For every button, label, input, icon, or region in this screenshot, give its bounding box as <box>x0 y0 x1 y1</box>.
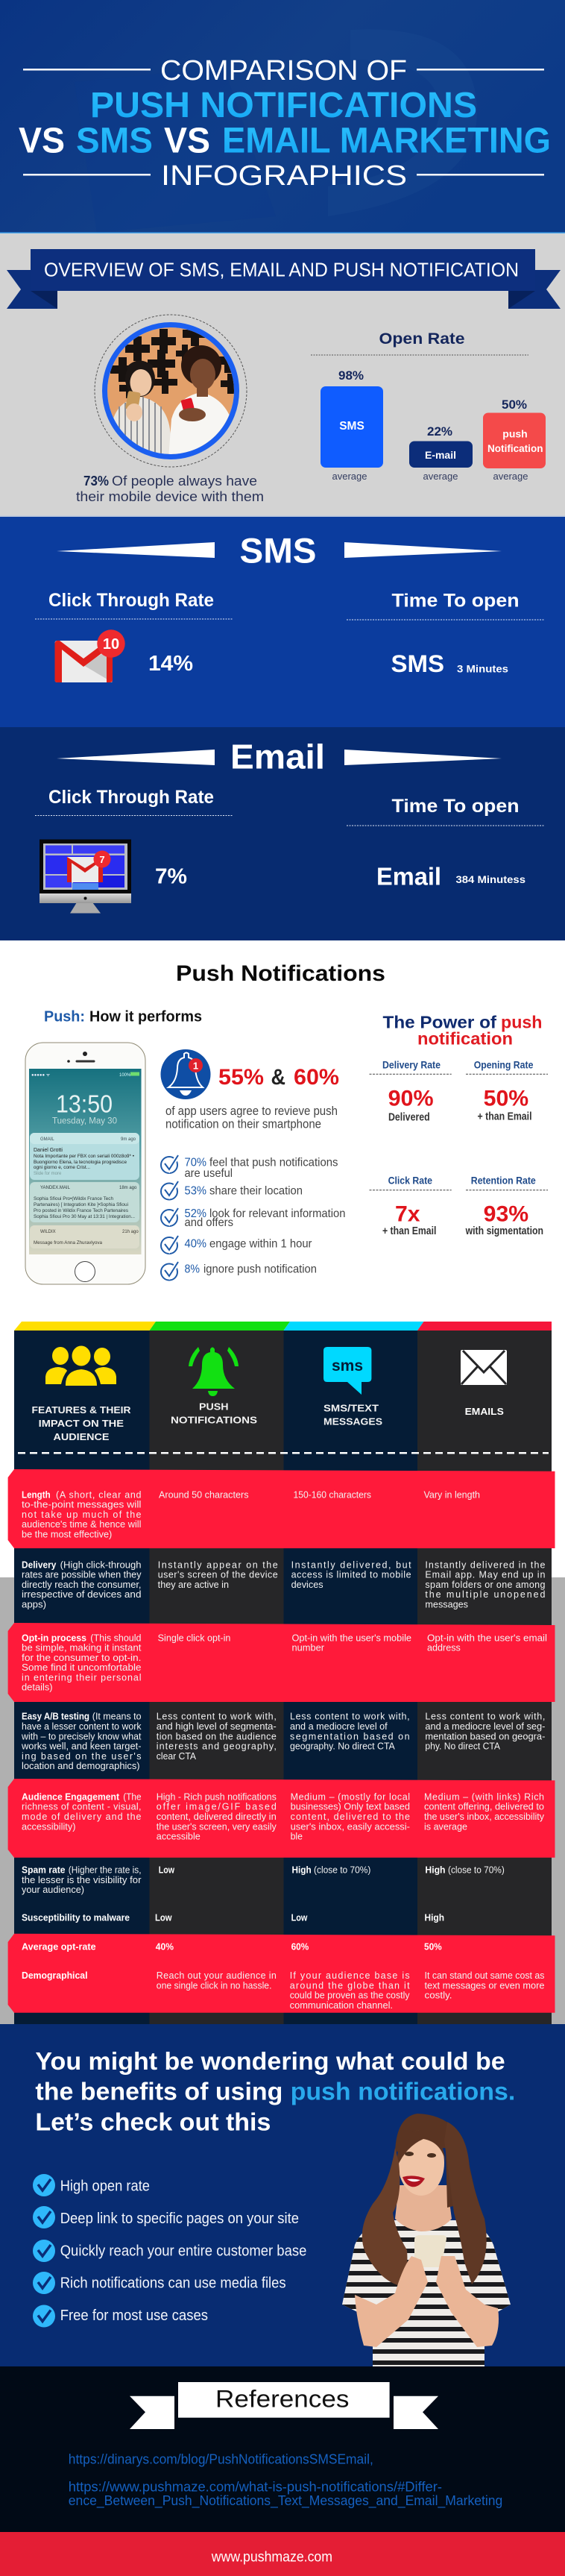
table header: sms: SMS/TEXT <box>323 1404 379 1414</box>
icon: envelope <box>461 1350 507 1385</box>
row: easy A/B testing: tion based on the audience <box>157 1731 277 1741</box>
row: audience engagement: is average <box>424 1821 467 1832</box>
title: INFOGRAPHICS <box>161 160 407 192</box>
benefit: rich notifications: Rich notifications can use media files <box>60 2275 286 2292</box>
row: easy A/B testing: geography. No direct CTA <box>290 1741 395 1752</box>
icon: people <box>45 1345 116 1386</box>
checklist <box>161 1155 346 1280</box>
row: easy A/B testing: location and demographics) <box>22 1761 140 1771</box>
row: average opt-rate and demographical: 60% <box>291 1941 309 1952</box>
row: delivery: messages <box>425 1599 468 1609</box>
Email heading: Email <box>230 737 325 776</box>
subheading: how it performs: Push: <box>44 1008 85 1025</box>
item: 52 percent: look for relevant information <box>209 1207 346 1220</box>
item: 53 percent: share their location <box>209 1185 303 1198</box>
click through rate: Click Through Rate <box>48 787 214 808</box>
bar: push notification 50% <box>483 398 546 482</box>
row: spam rate: High <box>292 1865 312 1876</box>
item: 70 percent: are useful <box>185 1167 233 1180</box>
notification card: yandex <box>30 1182 139 1222</box>
row: delivery: apps) <box>22 1599 46 1609</box>
row: delivery: access is limited to mobile <box>291 1570 411 1580</box>
stat: 55 and 60 percent: 60% <box>294 1065 339 1090</box>
Email heading <box>57 737 502 776</box>
row: easy A/B testing: Less content to work with, <box>425 1712 545 1722</box>
row: easy A/B testing: Less content to work with, <box>290 1712 410 1722</box>
table header: features: FEATURES & THEIR <box>31 1405 131 1416</box>
benefit: free: Free for most use cases <box>60 2308 208 2324</box>
row: average opt-rate and demographical: It can stand out same cost as <box>425 1970 544 1981</box>
stat: click rate: + than Email <box>382 1225 436 1237</box>
row: audience engagement: offer image/GIF based <box>157 1802 277 1812</box>
click through rate: Click Through Rate <box>48 590 214 611</box>
row: easy A/B testing: Less content to work with, <box>157 1712 277 1722</box>
row: audience engagement: the user's inbox, accessibility <box>424 1812 545 1822</box>
row: audience engagement: mode of delivery and the <box>22 1812 142 1822</box>
row: audience engagement: user's inbox, easily accessi- <box>291 1821 410 1832</box>
item: 70 percent: feel that push notifications <box>209 1156 338 1169</box>
references banner <box>130 2382 438 2429</box>
row: average opt-rate and demographical: text messages or even more <box>425 1980 545 1991</box>
stat: 55 and 60 percent: 55% <box>218 1065 264 1090</box>
stat: retention rate <box>465 1175 548 1237</box>
row: delivery: Instantly delivered in the <box>425 1559 545 1570</box>
row: spam rate: High <box>425 1865 446 1876</box>
row: average opt-rate and demographical: around the globe than it <box>290 1980 410 1991</box>
benefits headline: Let’s check out this <box>35 2108 271 2136</box>
row: opt-in process: in entering their personal <box>22 1672 142 1683</box>
row: length: not take up much of the <box>22 1510 142 1520</box>
stat: click rate: Click Rate <box>388 1175 432 1187</box>
overview ribbon banner <box>7 249 561 309</box>
row: easy A/B testing: with – to precisely know what <box>21 1731 142 1741</box>
stat: delivery rate <box>370 1059 452 1123</box>
notification card: yandex: YANDEX.MAIL <box>40 1186 71 1190</box>
row: length <box>8 1469 555 1548</box>
item: 40 percent: engage within 1 hour <box>209 1237 312 1250</box>
power heading: push <box>501 1012 543 1031</box>
footer <box>0 2532 565 2576</box>
row: opt-in process: be simple, making it instant <box>22 1643 142 1653</box>
reference links <box>69 2451 502 2509</box>
row: average opt-rate and demographical: Reach out your audience in <box>157 1970 277 1981</box>
row: easy A/B testing <box>21 1712 545 1771</box>
item: 8 percent: 8% <box>185 1263 200 1276</box>
table header: sms: MESSAGES <box>323 1417 382 1427</box>
stat: delivery rate: Delivered <box>388 1110 430 1123</box>
table header: features <box>31 1345 131 1442</box>
row: opt-in process: Some find it uncomfortable <box>22 1662 142 1673</box>
row: delivery: devices <box>291 1580 323 1590</box>
row: easy A/B testing: and a mediocre level of seg- <box>425 1721 545 1732</box>
notification card: gmail: Slide for more <box>34 1172 62 1176</box>
row: opt-in process: Opt-in process <box>22 1633 86 1643</box>
row: audience engagement: Audience Engagement <box>22 1791 120 1802</box>
time to open <box>347 591 545 677</box>
notification card: gmail: GMAIL <box>40 1137 54 1142</box>
row: easy A/B testing: segmentation based on <box>290 1731 410 1741</box>
bar: push notification 50%: Notification <box>487 442 543 454</box>
notification card: yandex: 18m ago <box>119 1186 137 1190</box>
stat: 73 percent <box>76 474 264 504</box>
notification card: yandex: Sophia Sfioui Pro•(Wildix France Tech <box>34 1197 113 1201</box>
table header: features: IMPACT ON THE <box>39 1419 124 1429</box>
panel: benefits <box>0 2024 565 2368</box>
row: delivery: Delivery <box>22 1559 56 1570</box>
time to open: Time To open <box>392 591 519 612</box>
notification card: gmail: Nota Importante per FBX con seriali 000z8o9* • <box>34 1155 134 1159</box>
row: audience engagement: ble <box>291 1832 303 1842</box>
bar: E-mail 22%: average <box>423 471 458 482</box>
row: opt-in process: Opt-in with the user's mobile <box>292 1633 411 1643</box>
row: audience engagement: accessibility) <box>22 1821 76 1832</box>
stat: 73 percent: 73% <box>83 474 109 489</box>
stat: retention rate: Retention Rate <box>471 1175 536 1187</box>
text: app users: notification on their smartphone <box>165 1117 321 1131</box>
row: audience engagement: High - Rich push notifications <box>157 1791 277 1802</box>
time to open: 3 Minutes <box>457 662 508 674</box>
item: 53 percent: 53% <box>185 1185 206 1198</box>
row: spam rate: Spam rate <box>22 1865 66 1876</box>
bar: push notification 50%: push <box>502 428 528 440</box>
row: susceptibility to malware: Susceptibility to malware <box>22 1913 130 1923</box>
benefit: rich notifications <box>33 2272 286 2294</box>
power heading: The Power of <box>383 1012 496 1031</box>
row: spam rate <box>22 1865 505 1895</box>
row: opt-in process <box>8 1623 555 1702</box>
row: delivery: spam folders or one among <box>425 1580 545 1590</box>
row: opt-in process: address <box>427 1643 461 1653</box>
subheading: how it performs: How it performs <box>89 1008 202 1025</box>
gray backdrop behind table <box>0 1577 565 2025</box>
text: app users: of app users agree to revieve push <box>165 1104 338 1118</box>
item: 70 percent <box>161 1155 338 1180</box>
benefits checklist <box>33 2174 306 2327</box>
time to open <box>347 796 545 890</box>
row: length: Vary in length <box>423 1489 480 1500</box>
row: average opt-rate and demographical: communication channel. <box>290 2000 393 2011</box>
stat: opening rate: 50% <box>484 1087 528 1111</box>
table header: features: AUDIENCE <box>54 1432 109 1442</box>
panel: references <box>0 2366 565 2532</box>
time to open: Email <box>376 862 441 890</box>
power heading <box>383 1012 543 1049</box>
row: spam rate: the lesser is the visibility for <box>22 1875 142 1885</box>
stat: 73 percent: their mobile device with them <box>76 489 264 504</box>
phone mockup <box>25 1043 145 1284</box>
title: SMS <box>76 121 153 161</box>
reference links: ence_Between_Push_Notifications_Text_Messages_and_Email_Marketing <box>69 2493 502 2509</box>
table header: sms <box>323 1347 382 1427</box>
bar: push notification 50%: average <box>493 471 528 482</box>
time to open: 384 Minutess <box>456 873 525 885</box>
stat: 55 and 60 percent: & <box>271 1065 285 1090</box>
photo: two women with phones <box>95 315 247 467</box>
phone mockup: 100% <box>119 1073 131 1078</box>
row: delivery: Email app. May end up in <box>425 1570 545 1580</box>
row: easy A/B testing: works well, and keen target- <box>21 1741 141 1752</box>
row: easy A/B testing: clear CTA <box>157 1751 197 1762</box>
benefit: reach customer base: Quickly reach your entire customer base <box>60 2243 306 2259</box>
table header: emails: EMAILS <box>465 1407 504 1417</box>
time to open: SMS <box>391 650 444 677</box>
icon: bell with badge: 1 <box>193 1061 198 1071</box>
row: susceptibility to malware <box>22 1913 444 1923</box>
icon: sms bubble: sms <box>332 1357 363 1375</box>
row: average opt-rate and demographical <box>8 1934 555 2013</box>
chart heading: Open Rate <box>379 330 465 348</box>
phone mockup: 13:50 <box>56 1090 113 1117</box>
row: delivery: rates are possible when they <box>22 1570 142 1580</box>
row: average opt-rate and demographical: 40% <box>156 1941 174 1952</box>
row: susceptibility to malware: High <box>425 1913 444 1923</box>
row: opt-in process: number <box>292 1643 324 1653</box>
row: opt-in process: (This should <box>90 1633 142 1643</box>
table header: push notifications <box>171 1347 257 1425</box>
heading: Push Notifications <box>176 961 385 986</box>
row: delivery: they are active in <box>158 1580 229 1590</box>
panel: comparison table <box>8 1322 555 2024</box>
notification card: gmail: Buongiorno Elena, la tecnologia progredisce <box>34 1160 127 1165</box>
bar: SMS 98% <box>321 368 383 482</box>
row: average opt-rate and demographical: If your audience base is <box>290 1970 410 1981</box>
click through rate: 7% <box>155 865 187 889</box>
notification card: wildix: WILDIX <box>40 1230 56 1234</box>
item: 40 percent: 40% <box>185 1237 206 1250</box>
row: delivery <box>22 1559 545 1609</box>
benefit: high open rate <box>33 2174 150 2196</box>
stat: 55 and 60 percent <box>218 1065 339 1090</box>
click through rate <box>35 590 233 682</box>
row: easy A/B testing: and high level of segmenta- <box>157 1721 277 1732</box>
reference links: https://dinarys.com/blog/PushNotificationsSMSEmail, <box>69 2451 373 2466</box>
benefits headline <box>35 2047 515 2136</box>
benefits headline: the benefits of using <box>35 2078 282 2105</box>
row: audience engagement <box>8 1779 555 1858</box>
benefits headline: push notifications. <box>291 2078 515 2105</box>
benefits headline: You might be wondering what could be <box>35 2047 505 2075</box>
row: spam rate: (close to 70%) <box>314 1865 370 1876</box>
phone mockup: ●●●●● ᯤ <box>31 1073 51 1078</box>
notification card: yandex: Partenaires) [ Integration Kite ]•Sophia Sfioui <box>34 1203 128 1207</box>
bar: push notification 50%: 50% <box>502 398 527 412</box>
table header: emails <box>461 1350 507 1417</box>
row: length: (A short, clear and <box>56 1489 142 1500</box>
bar: E-mail 22%: 22% <box>427 424 452 439</box>
bar: SMS 98%: 98% <box>338 368 364 383</box>
title: COMPARISON OF <box>160 55 407 87</box>
benefit: deep link <box>33 2206 299 2228</box>
row: spam rate: Low <box>159 1865 174 1876</box>
bar: E-mail 22%: E-mail <box>425 449 456 461</box>
panel: header <box>0 0 565 233</box>
stat: delivery rate: Delivery Rate <box>382 1059 441 1071</box>
stat: opening rate <box>466 1059 548 1123</box>
icon: desktop with mail: 7 <box>99 854 105 865</box>
row: length: Length <box>22 1489 51 1500</box>
row: easy A/B testing: interests and geography, <box>157 1741 277 1752</box>
item: 70 percent: 70% <box>185 1156 206 1169</box>
row: delivery: Instantly appear on the <box>158 1559 278 1570</box>
row: audience engagement: content offering, delivered to <box>424 1802 544 1812</box>
panel: overview <box>0 233 565 517</box>
text: app users <box>165 1104 338 1131</box>
overview ribbon banner: OVERVIEW OF SMS, EMAIL AND PUSH NOTIFICATION <box>44 258 519 280</box>
phone mockup: Tuesday, May 30 <box>52 1117 117 1126</box>
notification card: gmail: ogni giorno e, come Crist... <box>34 1166 90 1170</box>
row: easy A/B testing: Easy A/B testing <box>22 1712 89 1722</box>
panel: SMS <box>0 516 565 727</box>
bar: E-mail 22% <box>409 424 473 482</box>
row: opt-in process: for the consumer to opt-in. <box>22 1653 141 1663</box>
row: easy A/B testing: have a lesser content to work <box>22 1721 142 1732</box>
row: average opt-rate and demographical: costly. <box>425 1991 452 2001</box>
title <box>19 55 551 192</box>
footer: www.pushmaze.com <box>211 2549 332 2565</box>
item: 40 percent <box>161 1236 312 1254</box>
click through rate: 14% <box>148 652 193 676</box>
notification card: gmail: Daniel Grotti <box>34 1148 63 1153</box>
row: average opt-rate and demographical: could be proven as the costly <box>290 1991 410 2001</box>
open rate chart <box>311 330 546 482</box>
row: easy A/B testing: mentation based on geogra- <box>425 1731 545 1741</box>
notification card: yandex: Pro posted in Wildix France Tech Partenaires <box>34 1209 128 1213</box>
benefit: deep link: Deep link to specific pages on your site <box>60 2211 299 2227</box>
row: average opt-rate and demographical: Average opt-rate <box>22 1941 96 1952</box>
stat: 73 percent: Of people always have <box>112 474 257 489</box>
row: easy A/B testing: ing based on the user's <box>22 1751 142 1762</box>
icon: gmail badge: 10 <box>103 636 119 653</box>
row: audience engagement: Medium – (mostly for local <box>291 1791 410 1802</box>
panel: Email <box>0 727 565 940</box>
icon: green bell <box>189 1347 239 1396</box>
title: VS <box>19 121 65 161</box>
row: average opt-rate and demographical: Demographical <box>22 1970 88 1981</box>
row: average opt-rate and demographical: one single click in no hassle. <box>157 1980 271 1991</box>
row: delivery: Instantly delivered, but <box>291 1559 411 1570</box>
row: spam rate: (close to 70%) <box>448 1865 505 1876</box>
title: EMAIL MARKETING <box>222 121 551 161</box>
notification card: yandex: Sophia Sfioui Pro 30 May at 13:31 | Integration... <box>34 1215 135 1219</box>
row: length: to-the-point messages will <box>22 1500 142 1510</box>
row: length: 150-160 characters <box>294 1489 371 1500</box>
stat: retention rate: 93% <box>484 1201 528 1226</box>
row: opt-in process: Single click opt-in <box>158 1633 230 1643</box>
title: VS <box>164 121 210 161</box>
row: audience engagement: the user's screen, very easily <box>157 1821 277 1832</box>
row: delivery: (High click-through <box>60 1559 142 1570</box>
reference links: https://www.pushmaze.com/what-is-push-notifications/#Differ- <box>69 2480 442 2495</box>
icon: gmail badge <box>55 629 125 682</box>
icon: desktop with mail <box>40 840 131 913</box>
row: average opt-rate and demographical: 50% <box>424 1941 442 1952</box>
power of push notification <box>370 1012 548 1237</box>
row: delivery: directly reach the consumer, <box>22 1580 142 1590</box>
row: susceptibility to malware: Low <box>291 1913 308 1923</box>
SMS heading: SMS <box>240 530 316 570</box>
notification card: gmail: 9m ago <box>121 1137 136 1142</box>
item: 52 percent: and offers <box>185 1216 233 1229</box>
photo: woman with phone <box>339 2114 514 2368</box>
row: delivery: user's screen of the device <box>158 1570 278 1580</box>
notification card: wildix: Message from Anna Zhuravlyova <box>34 1241 103 1245</box>
panel: push notifications <box>0 940 565 1577</box>
table header: push notifications: NOTIFICATIONS <box>171 1415 257 1425</box>
row: easy A/B testing: and a mediocre level of <box>290 1721 388 1732</box>
row: length: be the most effective) <box>22 1529 112 1539</box>
item: 8 percent <box>161 1262 317 1280</box>
row: delivery: the multiple unopened <box>425 1589 545 1600</box>
item: 52 percent: 52% <box>185 1207 206 1220</box>
row: opt-in process: Opt-in with the user's email <box>427 1633 547 1643</box>
bar: SMS 98%: SMS <box>339 420 364 433</box>
notification card: gmail <box>30 1133 139 1180</box>
row: length: audience's time & hence will <box>22 1519 142 1530</box>
benefit: free <box>33 2305 208 2327</box>
row: audience engagement: Medium – (with links) Rich <box>424 1791 544 1802</box>
benefit: reach customer base <box>33 2240 306 2262</box>
references banner: References <box>215 2386 349 2413</box>
item: 8 percent: ignore push notification <box>203 1263 317 1276</box>
row: audience engagement: businesses) Only text based <box>291 1802 410 1812</box>
click through rate <box>35 787 233 913</box>
notification card: wildix <box>30 1225 139 1248</box>
row: length: Around 50 characters <box>159 1489 249 1500</box>
row: audience engagement: accessible <box>157 1832 201 1842</box>
row: audience engagement: content, delivered to the <box>291 1812 410 1822</box>
stat: retention rate: with sigmentation <box>465 1225 543 1237</box>
bar: SMS 98%: average <box>332 471 367 482</box>
row: audience engagement: richness of content - visual, <box>22 1802 142 1812</box>
stat: delivery rate: 90% <box>388 1087 434 1111</box>
row: spam rate: your audience) <box>22 1885 84 1895</box>
stat: click rate: 7x <box>395 1201 420 1226</box>
table header: push notifications: PUSH <box>199 1401 228 1412</box>
title: PUSH NOTIFICATIONS <box>90 86 477 125</box>
row: delivery: irrespective of devices and <box>22 1589 142 1600</box>
row: susceptibility to malware: Low <box>155 1913 172 1923</box>
stat: opening rate: Opening Rate <box>474 1059 534 1071</box>
item: 53 percent <box>161 1181 303 1199</box>
stat: click rate <box>370 1175 452 1237</box>
notification card: wildix: 21h ago <box>122 1230 139 1234</box>
SMS heading <box>57 530 502 570</box>
stat: opening rate: + than Email <box>477 1110 532 1123</box>
time to open: Time To open <box>392 796 519 817</box>
row: spam rate: (Higher the rate is, <box>69 1865 142 1876</box>
row: easy A/B testing: (It means to <box>92 1712 142 1722</box>
row: audience engagement: (The <box>123 1791 142 1802</box>
row: easy A/B testing: phy. No direct CTA <box>425 1741 501 1752</box>
benefit: high open rate: High open rate <box>60 2178 150 2195</box>
row: audience engagement: content, delivered directly in <box>157 1812 277 1822</box>
row: opt-in process: details) <box>22 1683 53 1693</box>
item: 52 percent <box>161 1207 346 1229</box>
icon: bell with badge <box>161 1049 210 1099</box>
power heading: notification <box>417 1029 513 1049</box>
